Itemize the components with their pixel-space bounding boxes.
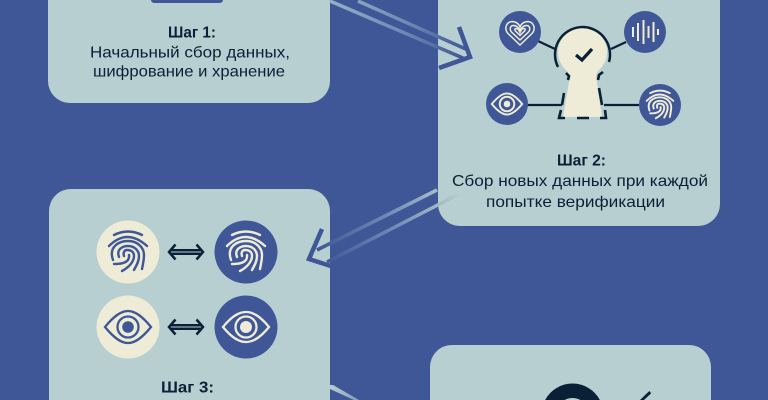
- panel: step 3: [49, 189, 330, 400]
- step 2 text: Сбор новых данных при каждой: [452, 173, 708, 190]
- icon: cream fingerprint: [96, 220, 160, 284]
- step 1 text: Шаг 1:: [168, 24, 216, 42]
- icon: eye: [486, 83, 528, 125]
- step 2 text: попытке верификации: [486, 194, 665, 211]
- step 2 text: [452, 152, 708, 211]
- icon: check mark stroke: [640, 391, 651, 400]
- icon: blue fingerprint: [214, 220, 278, 284]
- step 2 text: Шаг 2:: [557, 152, 606, 170]
- connector lines: [527, 41, 639, 105]
- icon: heart: [499, 11, 541, 53]
- step 3 text: Шаг 3:: [161, 380, 214, 396]
- panel: step 2: [438, 0, 720, 226]
- icon: magnifier ring: [545, 383, 600, 400]
- icon: fingerprint: [639, 84, 681, 126]
- step 1 text: [90, 24, 290, 80]
- arrow: step 3 to step 4: [330, 385, 359, 400]
- icon: voice: [624, 11, 666, 53]
- icon: double arrow fingerprint: [169, 244, 203, 260]
- arrow: step 2 to step 3: [309, 190, 463, 269]
- panel: step 1: [48, 0, 330, 103]
- icon: keyhole with check: [555, 27, 610, 118]
- step 1 text: Начальный сбор данных,: [90, 44, 290, 62]
- icon: step 1 partial badge: [151, 0, 223, 3]
- icon: double arrow eye: [169, 320, 203, 334]
- step 1 text: шифрование и хранение: [93, 64, 285, 80]
- icon: blue eye: [214, 296, 278, 358]
- panel: step 4: [430, 345, 711, 400]
- icon: cream eye: [96, 296, 160, 358]
- arrow: step 1 to step 2: [330, 1, 470, 68]
